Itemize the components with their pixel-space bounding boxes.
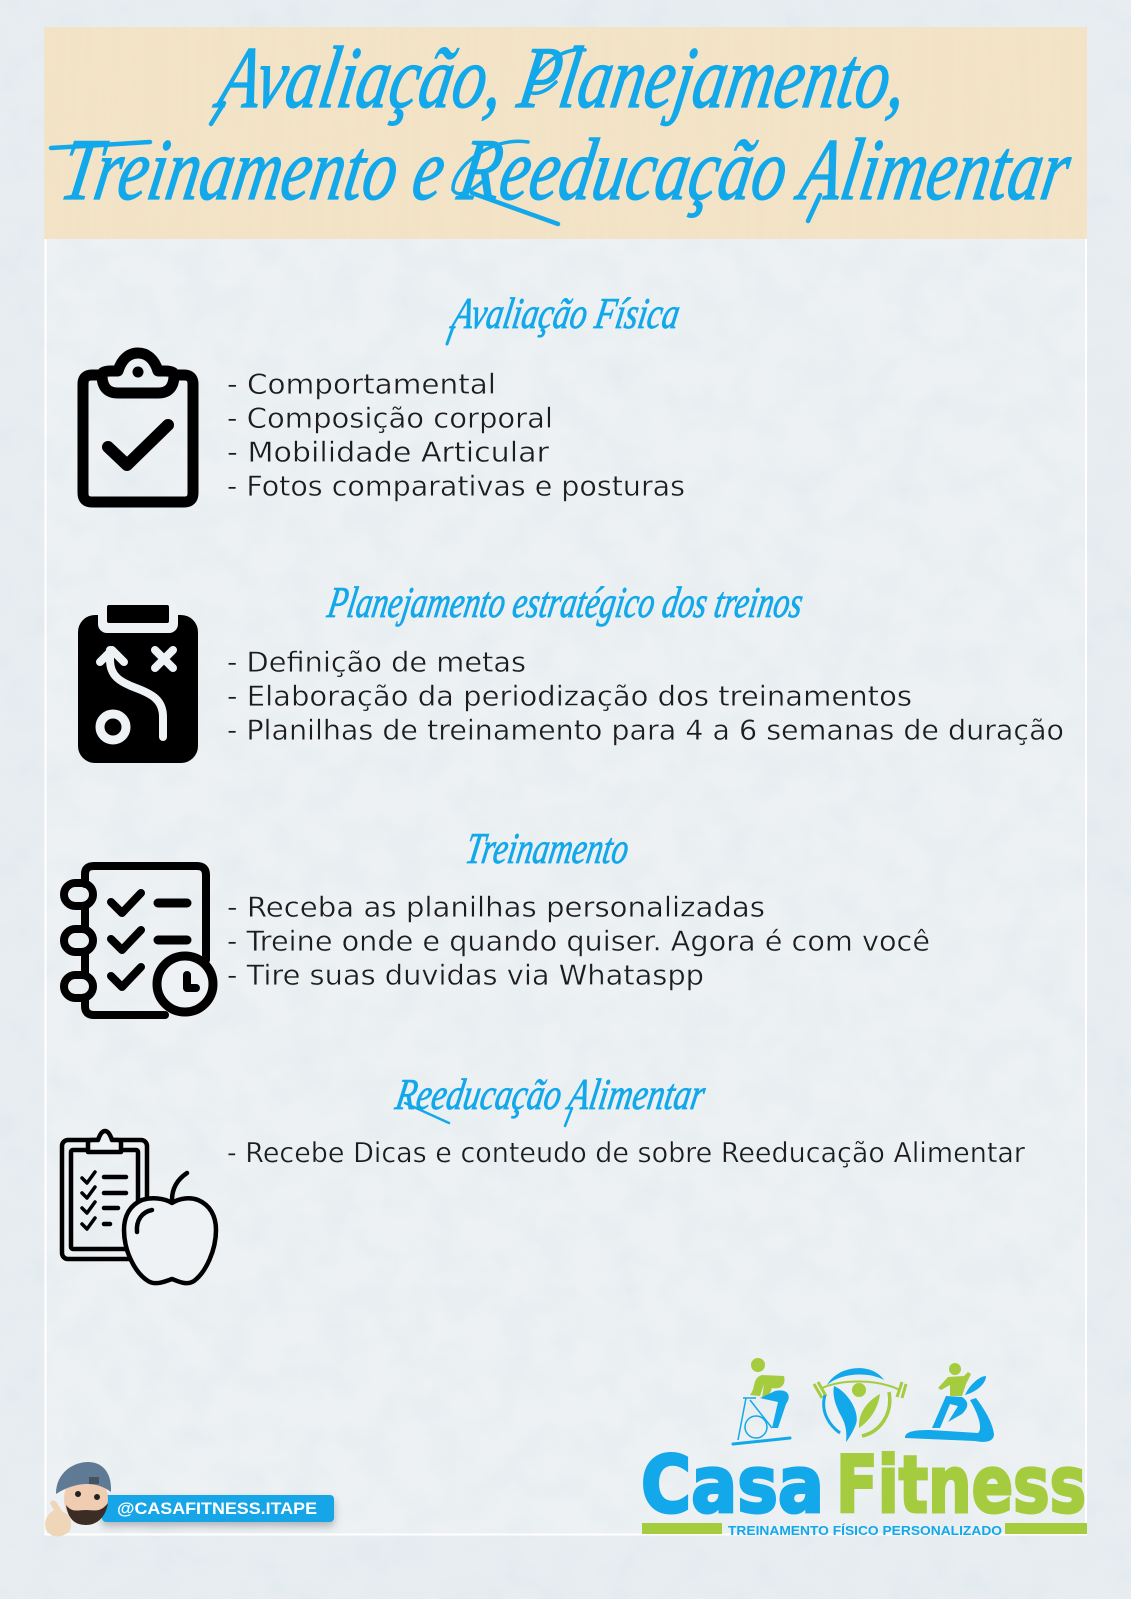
- logo tagline: [642, 1523, 1087, 1538]
- logo icon: exercise bike: [733, 1358, 790, 1444]
- text block: treinamento: - Receba as planilhas personalizadas: [227, 890, 765, 924]
- icon: clipboard and apple: [62, 1131, 216, 1283]
- social handle badge: [45, 1462, 334, 1537]
- heading: Reeducação Alimentar: [391, 1069, 710, 1126]
- text block: planejamento: - Elaboração da periodização dos treinamentos: [227, 680, 912, 712]
- icon: notebook checklist with clock: [64, 866, 213, 1015]
- logo tagline: TREINAMENTO FÍSICO PERSONALIZADO: [728, 1523, 1002, 1538]
- logo icon: treadmill runner: [905, 1363, 994, 1442]
- icon: clipboard with check: [83, 353, 193, 502]
- text block: treinamento: - Tire suas duvidas via Whataspp: [227, 958, 704, 992]
- text block: planejamento: [227, 646, 1064, 746]
- header banner: [44, 27, 1087, 239]
- icon: avatar with thumbs up: [45, 1462, 111, 1537]
- text block: reeducação alimentar: - Recebe Dicas e conteudo de sobre Reeducação Alimentar: [227, 1136, 1025, 1169]
- logo wordmark: [641, 1441, 1086, 1531]
- logo: Casa Fitness: [641, 1358, 1087, 1538]
- text block: planejamento: - Planilhas de treinamento para 4 a 6 semanas de duração: [227, 714, 1064, 746]
- title: [51, 30, 1078, 224]
- icon: tactical clipboard: [78, 600, 198, 763]
- heading: Planejamento estratégico dos treinos: Planejamento estratégico dos treinos: [324, 577, 807, 627]
- text block: treinamento: - Treine onde e quando quiser. Agora é com você: [227, 924, 930, 958]
- handle label: @CASAFITNESS.ITAPE: [117, 1500, 317, 1518]
- logo icon: central emblem: [814, 1368, 906, 1442]
- text block: avaliação física: - Composição corporal: [227, 402, 553, 434]
- text block: treinamento: [227, 890, 930, 992]
- text block: planejamento: - Definição de metas: [227, 646, 526, 678]
- white frame: [46, 239, 1086, 1534]
- text block: avaliação física: - Mobilidade Articular: [227, 436, 550, 468]
- text block: avaliação física: - Comportamental: [227, 368, 496, 400]
- text block: avaliação física: - Fotos comparativas e posturas: [227, 470, 685, 502]
- heading: Reeducação Alimentar: Reeducação Alimentar: [391, 1069, 710, 1119]
- text block: avaliação física: [227, 368, 685, 502]
- heading: Avaliação Física: [447, 288, 684, 344]
- heading: Treinamento: Treinamento: [462, 823, 633, 873]
- handle label: [102, 1495, 334, 1522]
- logo wordmark: Casa: [641, 1441, 824, 1531]
- heading: Avaliação Física: Avaliação Física: [447, 288, 684, 338]
- title: Avaliação, Planejamento,: [209, 30, 916, 127]
